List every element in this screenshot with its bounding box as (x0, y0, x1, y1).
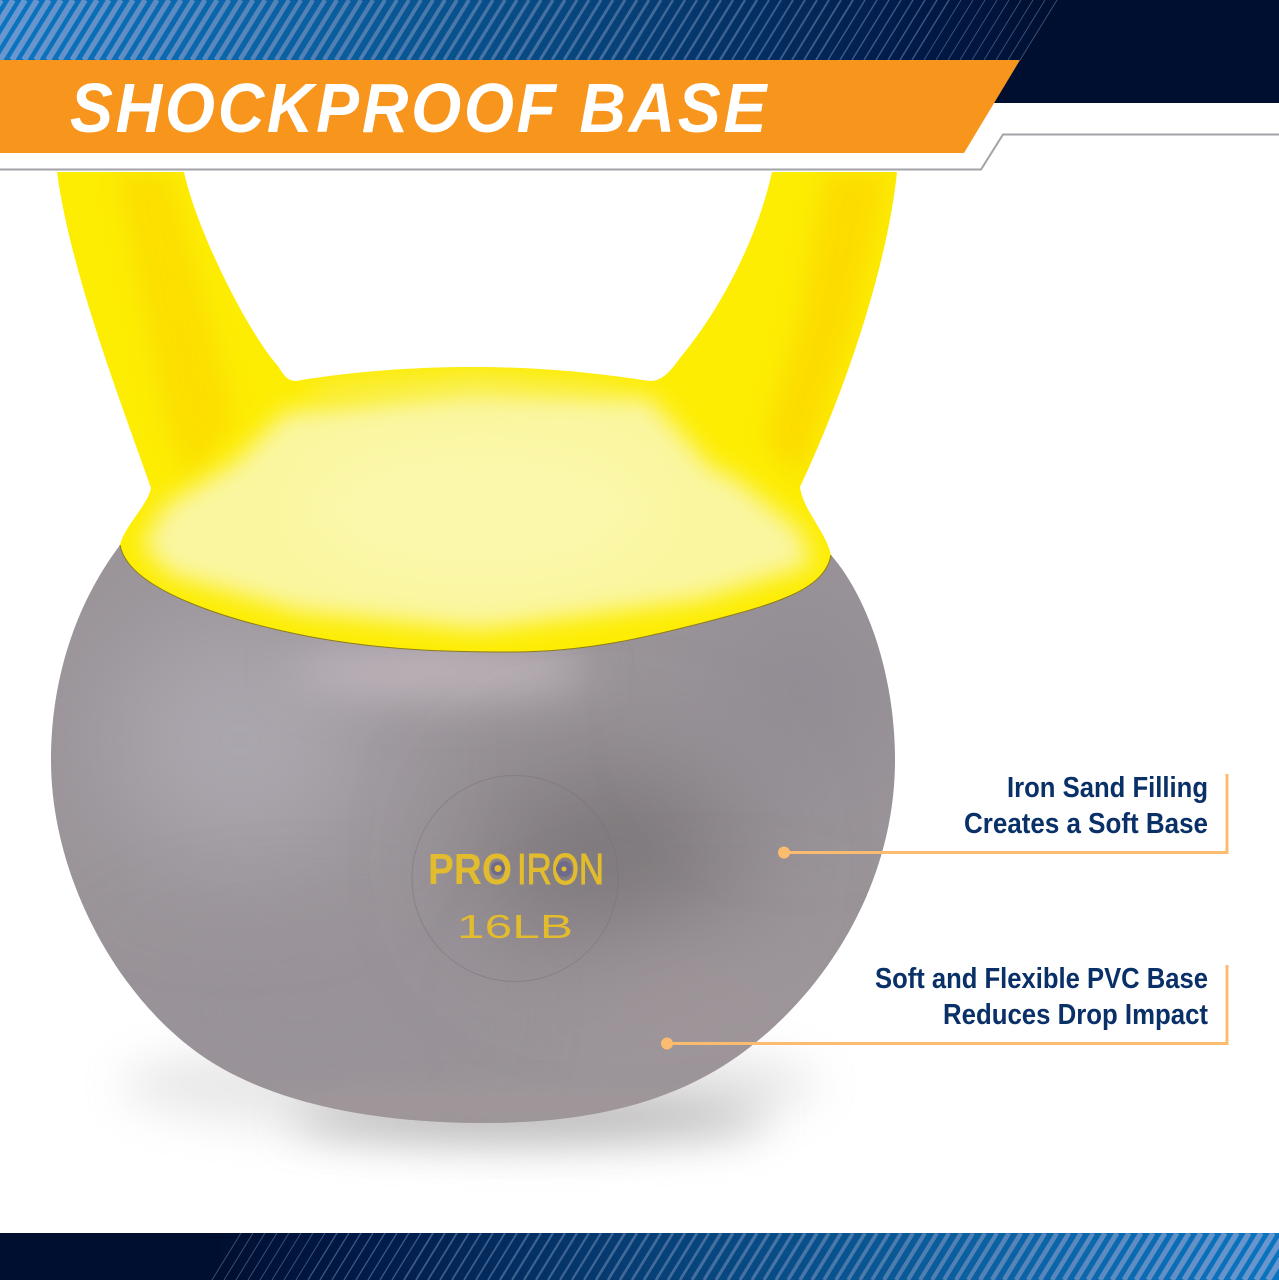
callout text: Reduces Drop Impact (943, 999, 1208, 1031)
logo emblem (412, 776, 618, 982)
header band (0, 0, 1279, 170)
weight label: 16LB (457, 908, 573, 945)
blue gradient stripe zone (0, 0, 1060, 60)
yellow top and handle (57, 172, 897, 652)
header outline (0, 134, 1279, 170)
brand logo (428, 845, 604, 894)
floor shadow (120, 1035, 820, 1142)
brand logo: IRON (517, 845, 604, 894)
callout leader (661, 965, 1227, 1050)
seam line (120, 545, 831, 652)
footer band (0, 1233, 1279, 1280)
emblem ring (412, 776, 618, 982)
orange title ribbon (0, 60, 1020, 153)
callout: iron sand filling (778, 772, 1227, 858)
callout text (875, 963, 1208, 1031)
grey PVC base (51, 545, 895, 1123)
brand logo: PRO (428, 845, 512, 894)
callout text (964, 772, 1208, 840)
callout leader (778, 774, 1227, 858)
kettlebell product image (51, 172, 897, 1142)
white under-header panel (0, 104, 1279, 169)
title: SHOCKPROOF BASE (70, 70, 768, 148)
callout text: Creates a Soft Base (964, 808, 1208, 840)
callout text: Soft and Flexible PVC Base (875, 963, 1208, 995)
navy header backing (0, 0, 1279, 103)
callout text: Iron Sand Filling (1007, 772, 1208, 804)
callout: PVC base (661, 963, 1227, 1050)
